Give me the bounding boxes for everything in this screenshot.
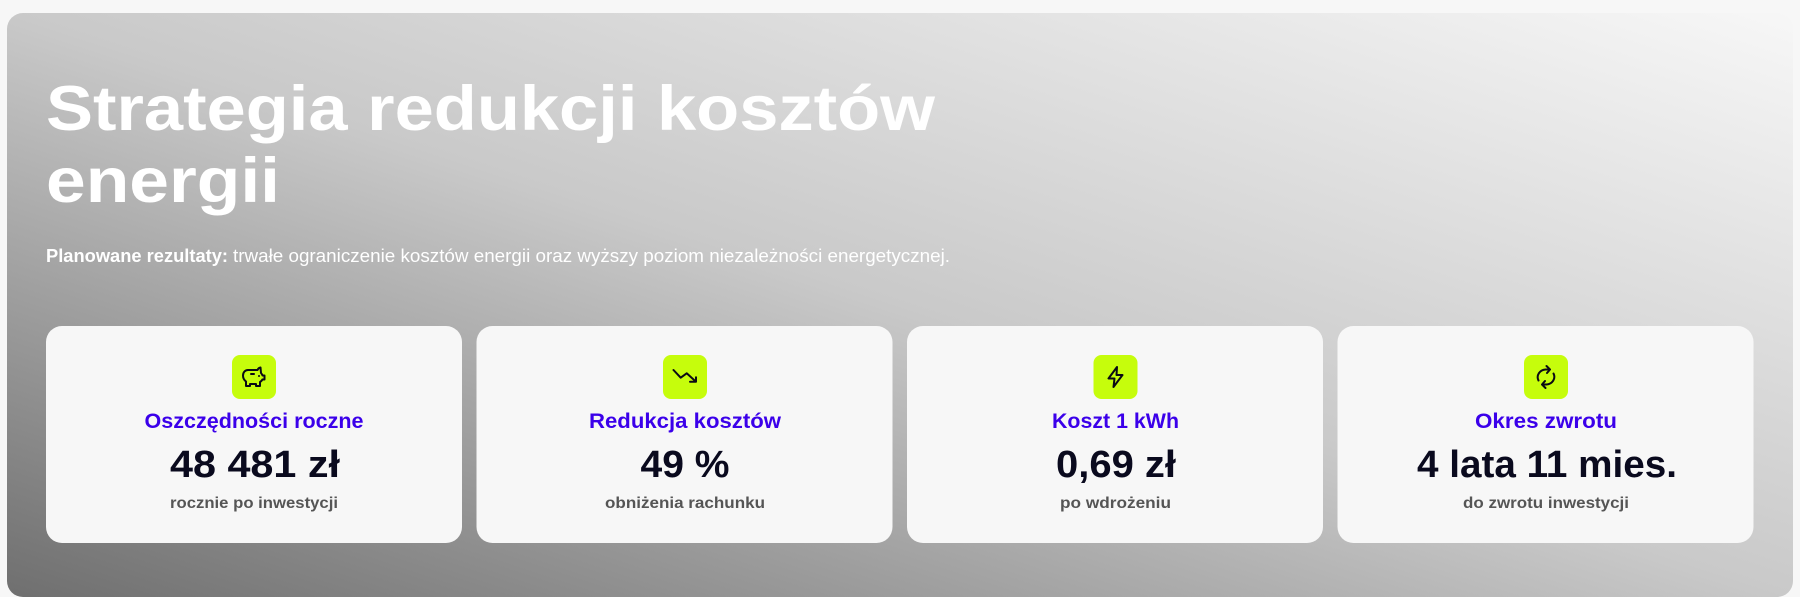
caption: rocznie po inwestycji xyxy=(170,495,338,512)
label: Koszt 1 kWh xyxy=(1052,410,1179,433)
title: Strategia redukcji kosztów xyxy=(46,74,936,144)
caption: obniżenia rachunku xyxy=(605,495,765,512)
icon: refresh arrows xyxy=(1524,355,1568,399)
caption: do zwrotu inwestycji xyxy=(1463,495,1629,512)
value: 0,69 zł xyxy=(1056,444,1176,486)
title: energii xyxy=(46,146,280,216)
panel: cost per kWh card xyxy=(907,326,1323,543)
panel: payback period card xyxy=(1338,326,1754,543)
label: Okres zwrotu xyxy=(1475,410,1617,433)
icon: lightning bolt xyxy=(1094,355,1138,399)
label: Redukcja kosztów xyxy=(589,410,782,433)
panel: cost reduction card xyxy=(476,326,892,543)
subtitle: planned results: Planowane rezultaty: xyxy=(46,246,228,266)
icon: trending down xyxy=(663,355,707,399)
value: 4 lata 11 mies. xyxy=(1417,444,1677,486)
value: 48 481 zł xyxy=(170,444,340,486)
icon: piggy bank xyxy=(232,355,276,399)
caption: po wdrożeniu xyxy=(1060,495,1171,512)
value: 49 % xyxy=(640,444,730,486)
panel: annual savings card xyxy=(46,326,462,543)
subtitle: planned results: trwałe ograniczenie kosztów energii oraz wyższy poziom niezależności energetycznej. xyxy=(233,246,950,266)
title xyxy=(46,74,936,216)
label: Oszczędności roczne xyxy=(144,410,364,433)
